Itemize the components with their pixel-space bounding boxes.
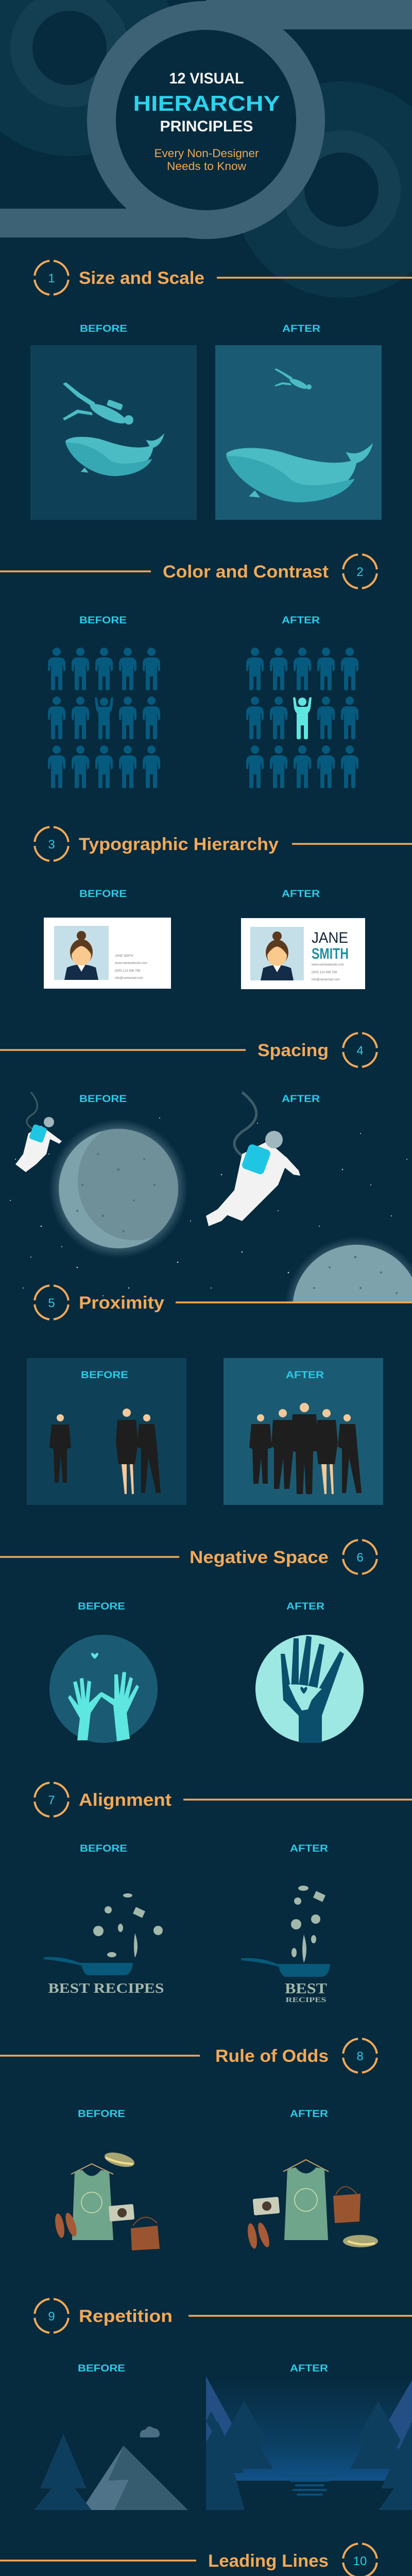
section 7 labels: BEFORE — [80, 1843, 127, 1854]
section 6 labels — [78, 1601, 324, 1612]
section 10 heading — [0, 2544, 377, 2576]
title: HIERARCHY — [133, 91, 280, 115]
card: after: SMITH — [312, 945, 349, 962]
panel: size before — [30, 345, 197, 520]
section 6 heading: 6 — [356, 1551, 364, 1565]
section 7 labels — [80, 1843, 328, 1854]
illustration: mountains before — [34, 2427, 188, 2510]
section 4 labels: BEFORE — [79, 1094, 127, 1105]
card: after: info@namemail.com — [312, 978, 340, 981]
section 8 labels: BEFORE — [78, 2109, 125, 2120]
chart: people before — [48, 648, 160, 788]
card: before — [44, 918, 171, 989]
section 7 labels: AFTER — [290, 1843, 328, 1854]
section 6 heading — [0, 1540, 377, 1574]
header — [0, 0, 412, 298]
section 3 labels: AFTER — [282, 889, 320, 900]
section 4 heading: Spacing — [258, 1041, 329, 1060]
icon: hands after — [255, 1635, 364, 1743]
section 8 labels — [78, 2109, 328, 2120]
section 1 heading — [35, 261, 412, 295]
subtitle — [154, 147, 259, 173]
section 9 heading: Repetition — [79, 2307, 173, 2326]
title — [133, 70, 280, 135]
chart: people after — [246, 648, 358, 788]
card: after: JANE — [312, 929, 348, 946]
section 4 heading — [0, 1033, 377, 1067]
card: after: www.namewebsite.com — [311, 963, 344, 967]
moon: after — [286, 1239, 412, 1301]
section 1 labels — [80, 324, 320, 334]
title: 12 VISUAL — [169, 70, 244, 87]
section 9 labels — [78, 2363, 328, 2374]
card: after — [241, 918, 365, 989]
icon: astronaut small — [15, 1092, 62, 1172]
section 2 labels — [79, 615, 320, 626]
icon: astronaut big — [206, 1092, 300, 1226]
section 3 labels: BEFORE — [79, 889, 127, 900]
section 9 heading — [35, 2299, 412, 2333]
illustration: outfit after — [246, 2160, 378, 2249]
section 8 heading: Rule of Odds — [215, 2046, 329, 2066]
card: after: (000) 123 456 789 — [312, 971, 337, 974]
icon: small diver — [274, 368, 312, 391]
panel: proximity after: AFTER — [286, 1370, 324, 1381]
icon: big whale — [226, 443, 373, 502]
section 1 labels: BEFORE — [80, 324, 127, 334]
logo: recipes before — [44, 1893, 164, 1996]
card: before: www.namewebsite.com — [114, 962, 147, 965]
icon: whale — [65, 433, 164, 476]
section 1 labels: AFTER — [282, 324, 320, 334]
section 1 heading: 1 — [48, 272, 55, 285]
stars — [10, 1117, 407, 1296]
moon: before — [49, 1119, 188, 1258]
section 2 heading: 2 — [356, 565, 364, 579]
section 9 labels: BEFORE — [78, 2363, 125, 2374]
section 4 heading: 4 — [356, 1044, 364, 1058]
section 6 labels: AFTER — [286, 1601, 324, 1612]
section 4 labels — [79, 1094, 320, 1105]
section 2 labels: AFTER — [282, 615, 320, 626]
section 8 heading: 8 — [356, 2049, 364, 2063]
card: before: (000) 123 456 789 — [115, 970, 141, 973]
section 7 heading: Alignment — [79, 1790, 171, 1810]
section 10 heading: Leading Lines — [208, 2551, 329, 2571]
card: before: info@namemail.com — [115, 977, 143, 980]
section 9 heading: 9 — [48, 2310, 55, 2324]
section 2 heading — [0, 554, 377, 588]
illustration: forest lake after — [206, 2376, 412, 2510]
section 4 labels: AFTER — [282, 1094, 320, 1105]
logo: recipes after — [241, 1886, 330, 2004]
logo: recipes after: RECIPES — [285, 1996, 327, 2004]
section 6 heading: Negative Space — [190, 1548, 329, 1567]
section 8 labels: AFTER — [290, 2109, 328, 2120]
section 6 labels: BEFORE — [78, 1601, 125, 1612]
illustration: outfit before — [54, 2150, 160, 2250]
section 1 heading: Size and Scale — [79, 268, 204, 288]
section 3 heading: 3 — [48, 838, 55, 852]
section 3 heading — [35, 827, 412, 861]
title: PRINCIPLES — [160, 118, 253, 135]
panel: proximity before: BEFORE — [81, 1370, 128, 1381]
section 7 heading: 7 — [48, 1793, 55, 1807]
people group — [249, 1403, 362, 1494]
logo: recipes after: BEST — [285, 1981, 327, 1997]
card: before: JANE SMITH — [115, 955, 133, 958]
section 7 heading — [35, 1783, 412, 1817]
section 5 heading: Proximity — [79, 1293, 164, 1313]
section 8 heading — [0, 2039, 377, 2073]
decorative rings — [0, 0, 412, 298]
subtitle: Needs to Know — [167, 160, 246, 173]
section 3 heading: Typographic Hierarchy — [79, 835, 279, 854]
icon: hands before — [49, 1635, 158, 1743]
logo: recipes before: BEST RECIPES — [48, 1980, 164, 1996]
subtitle: Every Non-Designer — [154, 147, 259, 160]
section 9 labels: AFTER — [290, 2363, 328, 2374]
panel: proximity before — [27, 1358, 186, 1505]
section 10 heading: 10 — [353, 2554, 367, 2568]
people group — [49, 1409, 161, 1494]
section 5 heading — [35, 1285, 412, 1319]
panel: proximity after — [224, 1358, 383, 1505]
icon: diver — [63, 382, 133, 427]
section 2 labels: BEFORE — [79, 615, 127, 626]
panel: size after — [215, 345, 382, 520]
section 3 labels — [79, 889, 320, 900]
section 5 heading: 5 — [48, 1296, 55, 1310]
section 2 heading: Color and Contrast — [163, 562, 329, 582]
